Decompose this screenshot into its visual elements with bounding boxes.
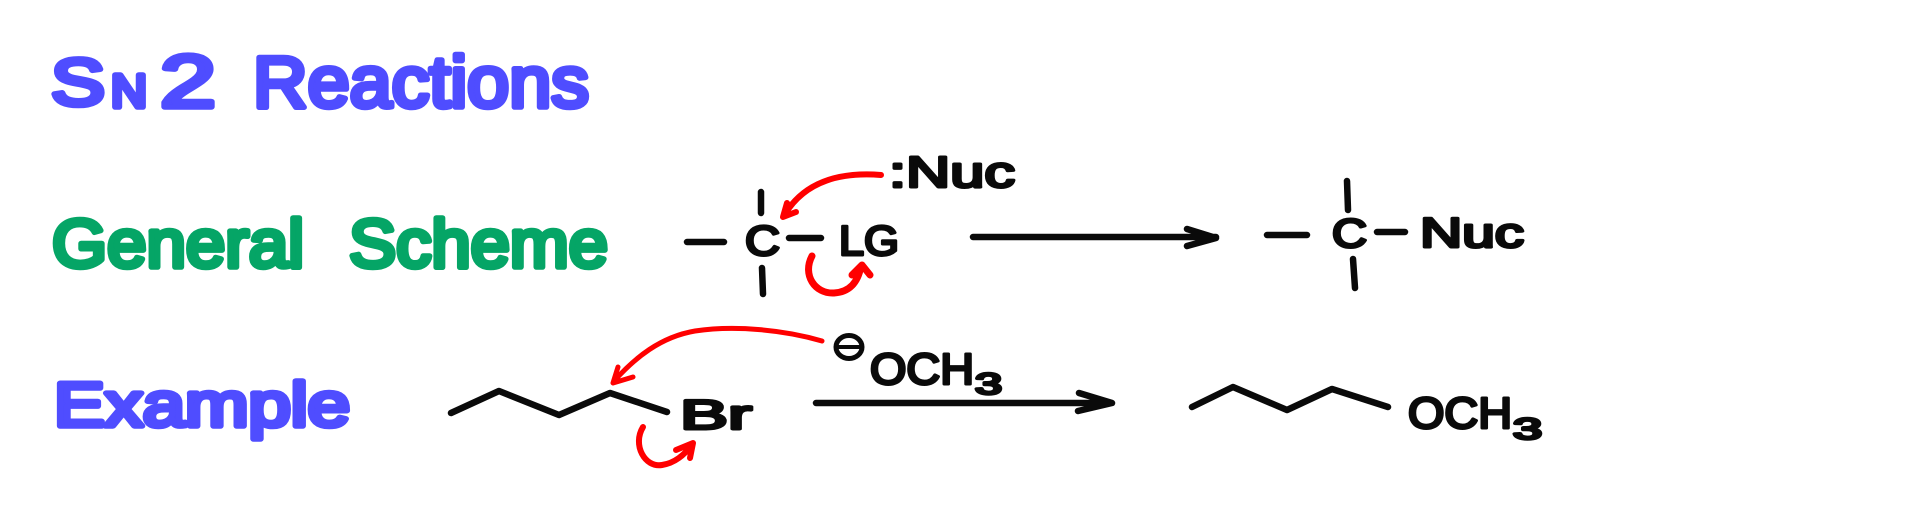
heading: General Scheme: General (52, 206, 304, 282)
general scheme reactant: C (745, 217, 780, 264)
red arrow: bromide departure (639, 427, 693, 465)
methoxide label: OCH (870, 345, 974, 394)
reaction arrow: example (816, 393, 1112, 411)
example product: alkyl chain (1192, 387, 1388, 410)
title: N (111, 65, 147, 117)
red arrow: methoxide attack (613, 328, 822, 383)
methoxide label: 3 (975, 368, 1002, 401)
title: Reactions (253, 43, 589, 123)
title: 2 (160, 40, 216, 123)
heading: General Scheme (52, 206, 608, 282)
methoxide label (870, 345, 1002, 401)
general scheme product (1267, 181, 1524, 288)
red arrow: leaving group departure (809, 256, 870, 293)
general scheme product: Nuc (1420, 209, 1524, 256)
heading: Example: Example (54, 371, 350, 440)
red arrow: nucleophile attack (783, 174, 881, 217)
general scheme product: C (1332, 212, 1367, 256)
general scheme reactant: LG (839, 217, 899, 264)
title (51, 40, 589, 123)
title: S (51, 45, 105, 119)
example reactant: alkyl chain (451, 391, 667, 415)
reaction arrow: general scheme (973, 229, 1216, 246)
heading: General Scheme: Scheme (349, 206, 608, 282)
bromine label: Br (680, 391, 752, 438)
negative charge symbol (836, 336, 862, 358)
product methoxy label: OCH (1408, 389, 1512, 438)
product methoxy label (1408, 389, 1542, 446)
nucleophile label: :Nuc (889, 148, 1015, 197)
product methoxy label: 3 (1513, 413, 1542, 446)
general scheme reactant (687, 192, 899, 294)
